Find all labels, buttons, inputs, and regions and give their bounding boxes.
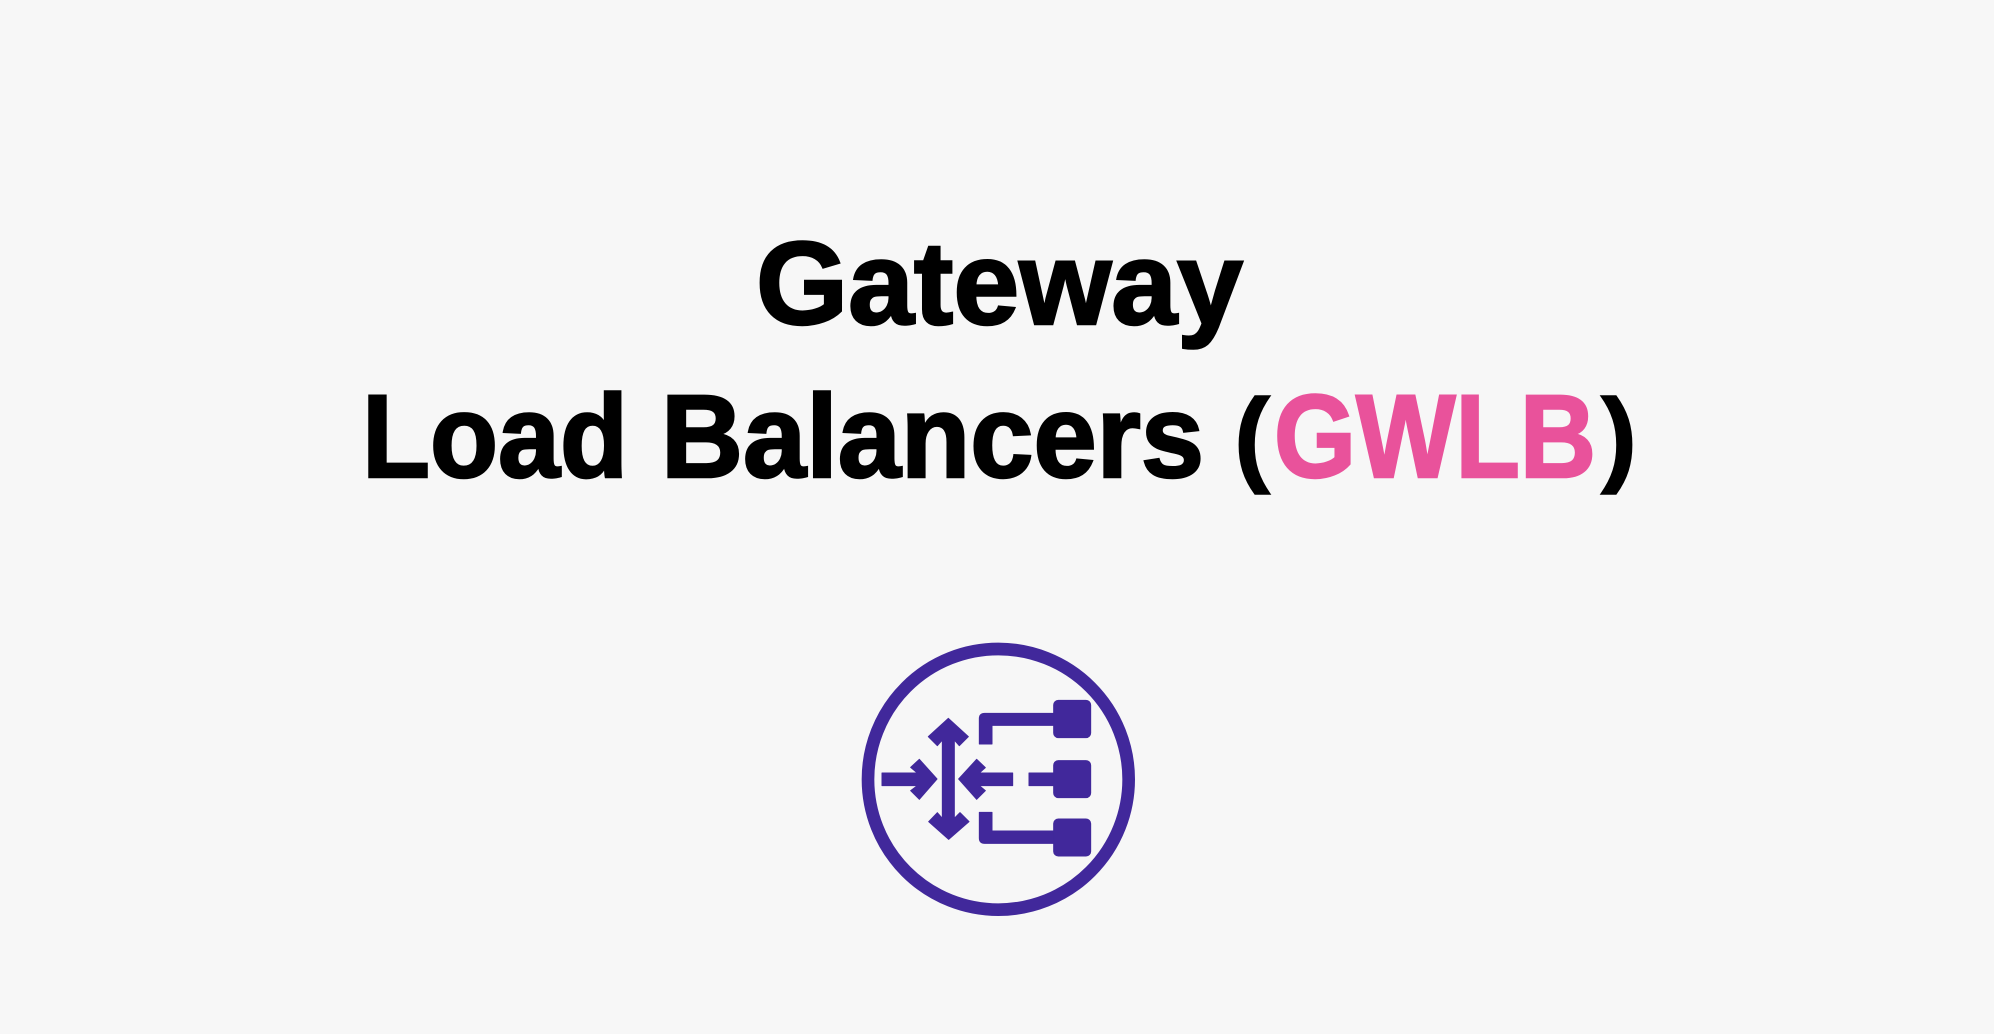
- word: Load: Load: [362, 371, 628, 503]
- closing parenthesis: ): [1601, 378, 1637, 495]
- title line 2: [362, 371, 1637, 503]
- word: Balancers: Balancers: [661, 371, 1204, 503]
- title: [362, 218, 1637, 503]
- title line 1: Gateway: [756, 218, 1243, 350]
- bottom target node: [1054, 819, 1091, 856]
- inbound arrow right: [959, 759, 1013, 799]
- middle target node: [1054, 761, 1091, 798]
- vertical double arrow: [928, 718, 969, 839]
- top target node: [1054, 700, 1091, 738]
- bottom target connector: [979, 812, 1057, 843]
- icon: gateway load balancer: [868, 649, 1129, 910]
- opening parenthesis: (: [1234, 378, 1270, 495]
- inbound arrow left: [882, 759, 937, 799]
- icon ring: [868, 649, 1129, 910]
- top target connector: [979, 713, 1057, 744]
- middle target connector: [1029, 773, 1057, 786]
- acronym GWLB: GWLB: [1274, 371, 1596, 503]
